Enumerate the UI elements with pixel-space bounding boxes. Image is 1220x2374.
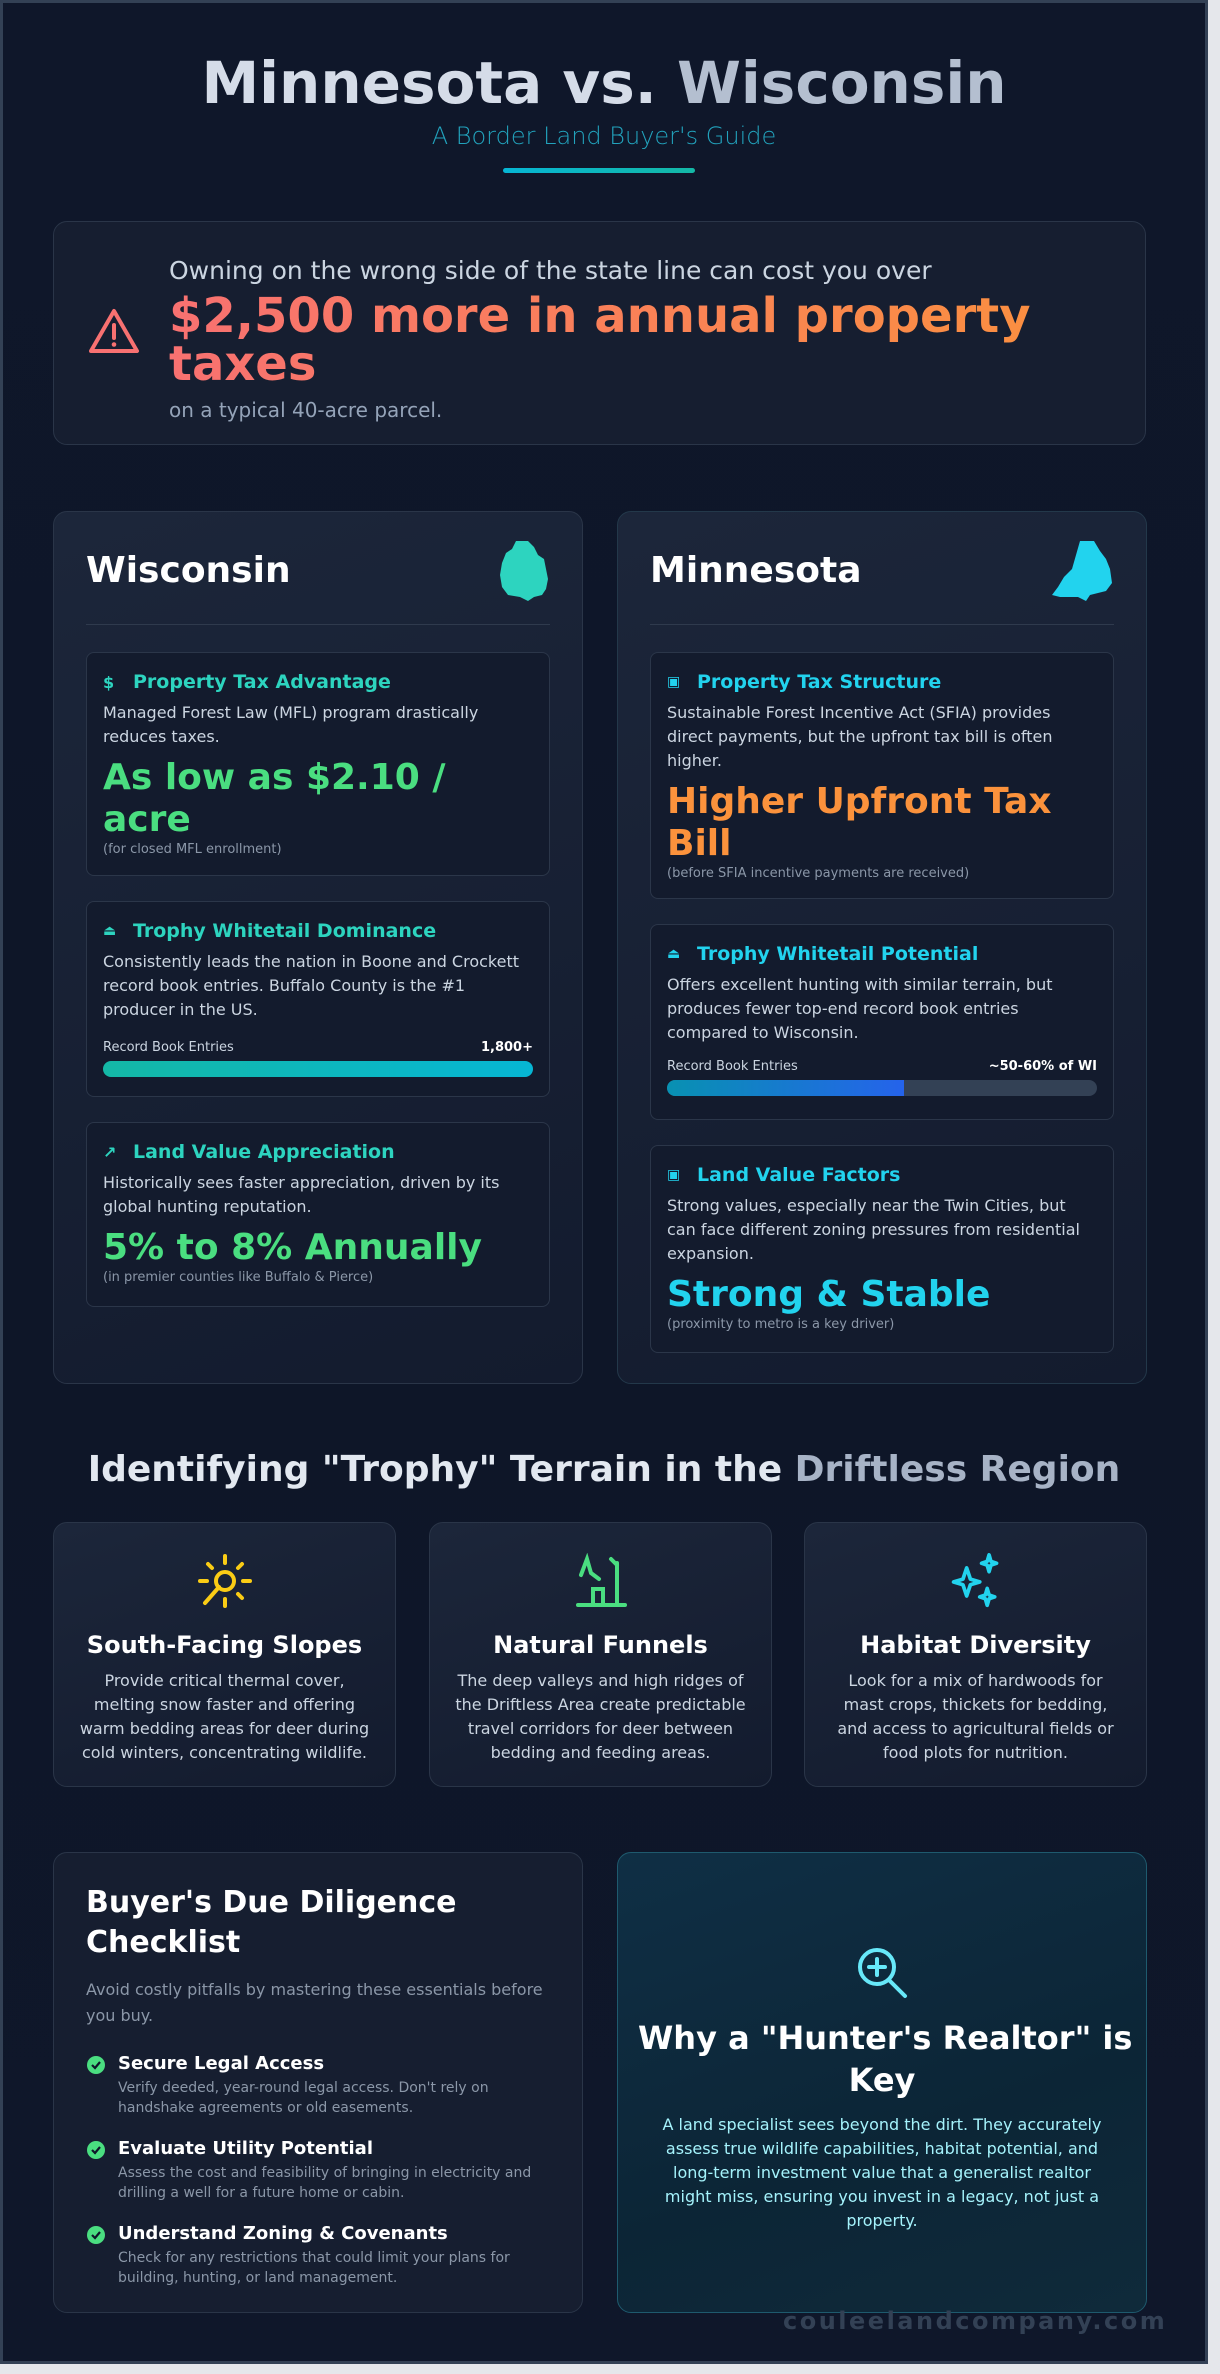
sub-card: trophy whitetail potential [650,924,1114,1120]
panel: south-facing slopes [53,1522,396,1787]
heading: Wisconsin [86,512,550,625]
panel: hunter's realtor [617,1852,1147,2313]
bar chart: record book entries MN: Record Book Entries [667,1059,798,1074]
bar chart: record book entries WI [103,1040,533,1077]
icon: magnifier [858,1948,908,1998]
sub-card: land value factors: Strong & Stable [667,1274,990,1315]
sub-card: land value factors: Strong values, especially near the Twin Cities, but can face different zoning pressures from residential expansion. [667,1196,1080,1263]
panel: natural funnels: Natural Funnels [493,1631,708,1659]
bar chart: record book entries WI: Record Book Entries [103,1040,234,1055]
sub-card: property tax structure: Property Tax Structure [697,671,941,693]
checklist item: legal access [87,2053,489,2116]
sub-card: trophy whitetail dominance [86,901,550,1097]
bar chart: record book entries MN [667,1059,1097,1096]
sub-card: land value factors: ▣ [667,1167,680,1183]
checklist item: utility potential [87,2138,531,2201]
heading: Minnesota: Minnesota [650,550,862,590]
panel: natural funnels [429,1522,772,1787]
sub-card: land value factors: (proximity to metro is a key driver) [667,1317,894,1332]
checklist item: zoning: Check for any restrictions that could limit your plans for building, hunting, or land management. [118,2250,510,2286]
panel: habitat diversity [804,1522,1147,1787]
panel: natural funnels: The deep valleys and high ridges of the Driftless Area create predictable travel corridors for deer between bedding and feeding areas. [455,1671,746,1762]
sub-card: trophy whitetail potential: ⏏ [667,946,680,962]
sub-card: land value appreciation: Land Value Appreciation [133,1141,395,1163]
body text: realtor: A land specialist sees beyond the dirt. They accurately assess true wildlife capabilities, habitat potential, and long-term investment value that a generalist realtor might miss, ensuring you invest in a legacy, not just a property. [663,2115,1101,2230]
panel: habitat diversity: Look for a mix of hardwoods for mast crops, thickets for bedding, and access to agricultural fields or food plots for nutrition. [837,1671,1114,1762]
icon: warning [89,308,140,353]
heading: realtor [638,2019,1132,2099]
sub-card: land value factors: Land Value Factors [697,1164,900,1186]
sub-card: property tax structure: Sustainable Forest Incentive Act (SFIA) provides direct payments, but the upfront tax bill is often higher. [667,703,1053,770]
heading: realtor: Key [849,2061,915,2099]
checklist item: zoning [87,2223,510,2286]
bar chart: record book entries MN: ~50-60% of WI [989,1059,1097,1074]
sub-card: property tax structure [650,652,1114,899]
sub-card: trophy whitetail potential: Offers excellent hunting with similar terrain, but produces fewer top-end record book entries compared to Wisconsin. [667,975,1052,1042]
icon: WI shape [500,541,548,601]
icon: sun [198,1554,252,1608]
sub-card: land value appreciation: ↗ [103,1142,116,1162]
callout text: Owning on the wrong side of the state line can cost you over [169,256,932,285]
panel: due diligence checklist [53,1852,583,2313]
title underline [503,168,695,173]
checklist item: utility potential: Assess the cost and feasibility of bringing in electricity and drilling a well for a future home or cabin. [118,2165,531,2201]
sub-card: property tax advantage: $ [103,672,114,692]
sub-card: property tax advantage [86,652,550,876]
checklist item: legal access: Verify deeded, year-round legal access. Don't rely on handshake agreements or old easements. [118,2080,489,2116]
sub-card: property tax structure: (before SFIA incentive payments are received) [667,866,969,881]
heading: realtor: Why a "Hunter's Realtor" is [638,2019,1132,2057]
section heading: trophy terrain: Identifying "Trophy" Terrain in the Driftless Region [88,1449,1120,1490]
sub-card: land value appreciation: Historically sees faster appreciation, driven by its global hunting reputation. [103,1173,499,1216]
panel: habitat diversity: Habitat Diversity [860,1631,1091,1659]
sub-card: property tax advantage: Managed Forest Law (MFL) program drastically reduces taxes. [103,703,478,746]
sub-card: property tax advantage: (for closed MFL enrollment) [103,842,282,857]
panel: south-facing slopes: South-Facing Slopes [87,1631,362,1659]
panel: Minnesota [617,511,1147,1384]
panel: Wisconsin [53,511,583,1384]
icon: sparkles [952,1553,998,1608]
heading: checklist: Buyer's Due Diligence Checklist [86,1885,457,1960]
sub-card: land value appreciation [86,1122,550,1307]
sub-card: land value factors [650,1145,1114,1353]
sub-card: trophy whitetail dominance: Consistently leads the nation in Boone and Crockett record book entries. Buffalo County is the #1 producer in the US. [103,952,519,1019]
sub-card: property tax structure: ▣ [667,674,680,690]
intro text: Avoid costly pitfalls by mastering these essentials before you buy. [86,1980,543,2025]
title: Minnesota vs. Wisconsin [201,49,1007,117]
sub-card: trophy whitetail dominance: Trophy Whitetail Dominance [133,920,436,942]
checklist item: zoning: Understand Zoning & Covenants [118,2223,448,2244]
sub-card: trophy whitetail potential: Trophy Whitetail Potential [697,943,978,965]
sub-card: property tax advantage: Property Tax Advantage [133,671,391,693]
checklist item: utility potential: Evaluate Utility Potential [118,2138,373,2159]
sub-card: land value appreciation: 5% to 8% Annually [103,1227,482,1268]
callout text [169,256,1030,422]
bar chart: record book entries WI: 1,800+ [481,1040,533,1055]
icon: funnel terrain [576,1553,627,1607]
heading: Wisconsin: Wisconsin [86,550,291,590]
sub-card: property tax advantage: As low as $2.10 / acre [103,757,446,840]
heading: Minnesota [650,512,1114,625]
panel: south-facing slopes: Provide critical thermal cover, melting snow faster and offering warm bedding areas for deer during cold winters, concentrating wildlife. [80,1671,369,1762]
subtitle: A Border Land Buyer's Guide [432,122,776,150]
sub-card: trophy whitetail dominance: ⏏ [103,923,116,939]
callout text: $2,500 more in annual property taxes [169,288,1030,392]
watermark: couleelandcompany.com [783,2307,1167,2335]
sub-card: land value appreciation: (in premier counties like Buffalo & Pierce) [103,1270,373,1285]
sub-card: property tax structure: Higher Upfront Tax Bill [667,781,1052,864]
callout text: on a typical 40-acre parcel. [169,398,442,422]
icon: MN shape [1052,541,1112,601]
checklist item: legal access: Secure Legal Access [118,2053,324,2074]
callout: tax warning [53,221,1146,445]
